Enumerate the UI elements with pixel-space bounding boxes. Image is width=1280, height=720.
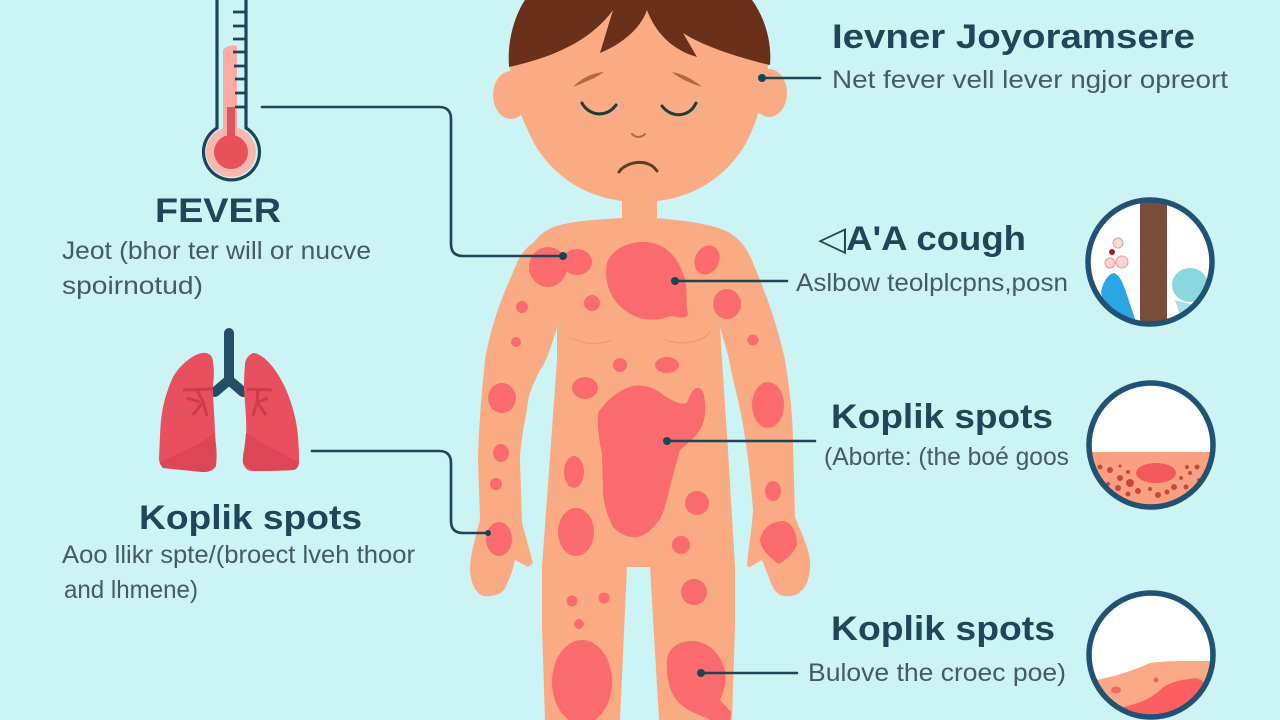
text: fever description: spoirnotud) bbox=[62, 272, 203, 300]
text: fever description bbox=[62, 237, 371, 300]
text: left koplik description: Aoo llikr spte/(broect lveh thoor bbox=[62, 541, 415, 569]
mouth bbox=[619, 162, 657, 172]
text: fever description: Jeot (bhor ter will or nucve bbox=[62, 237, 371, 265]
ears bbox=[493, 71, 529, 119]
heading: fever: FEVER bbox=[155, 192, 281, 230]
heading: top right: Ievner Joyoramsere bbox=[832, 18, 1195, 56]
icon: koplik spots circle bbox=[1085, 383, 1215, 512]
icon: lungs bbox=[159, 333, 299, 472]
icon: throat circle bbox=[1088, 195, 1212, 330]
text: cough description: Aslbow teolplcpns,posn bbox=[796, 269, 1068, 297]
text: bottom koplik description: Bulove the croec poe) bbox=[808, 659, 1066, 687]
child figure bbox=[470, 0, 810, 720]
rash spots bbox=[486, 241, 797, 720]
eyes bbox=[582, 103, 696, 115]
text: left koplik description: and lhmene) bbox=[64, 576, 198, 604]
text: top right description: Net fever vell lever ngjor opreort bbox=[832, 66, 1228, 94]
text: middle koplik description: (Aborte: (the boé goos bbox=[824, 443, 1069, 471]
nose bbox=[632, 134, 645, 137]
heading: left koplik spots: Koplik spots bbox=[139, 499, 362, 537]
body bbox=[470, 195, 810, 720]
leader lines bbox=[262, 74, 820, 677]
eyebrows bbox=[573, 72, 702, 87]
icon: thermometer bbox=[204, 0, 260, 180]
head bbox=[510, 0, 768, 202]
heading: cough: ◁A'A cough bbox=[818, 220, 1026, 258]
heading: middle koplik spots: Koplik spots bbox=[831, 398, 1053, 436]
chest creases bbox=[569, 332, 710, 343]
heading: bottom koplik spots: Koplik spots bbox=[831, 610, 1055, 648]
icon: skin rash circle bbox=[1085, 593, 1215, 720]
text: left koplik description bbox=[62, 541, 415, 604]
hair bbox=[509, 0, 770, 67]
